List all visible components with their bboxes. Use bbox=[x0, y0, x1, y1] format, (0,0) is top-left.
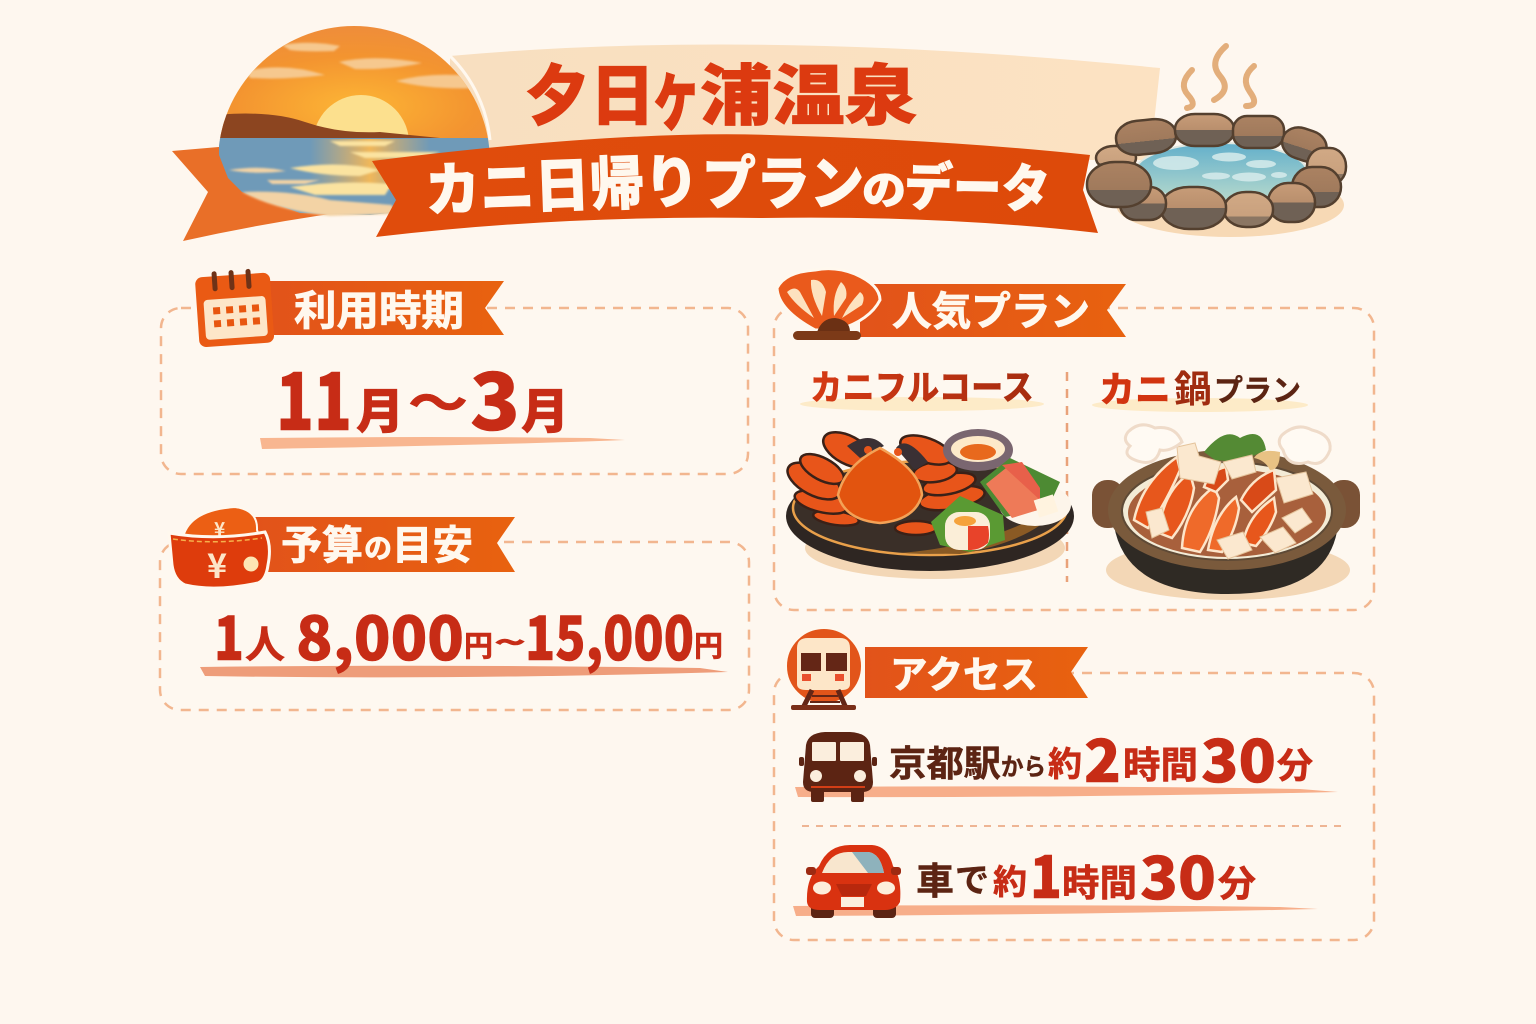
steam clouds bbox=[1125, 425, 1330, 464]
travel time text: 車 bbox=[916, 851, 954, 905]
subheading: カニ鍋プラン: プラン bbox=[1214, 366, 1301, 410]
section heading: 予算 bbox=[281, 513, 363, 571]
divider bbox=[1066, 372, 1068, 582]
icon: shell bbox=[777, 269, 880, 340]
shadow bbox=[1106, 540, 1350, 600]
illustration: crab platter bbox=[782, 425, 1074, 579]
budget value: 円 bbox=[694, 623, 723, 665]
tofu blocks bbox=[1146, 443, 1313, 559]
section heading: 目安 bbox=[392, 513, 473, 571]
illustration: crab hot pot bbox=[1092, 425, 1360, 600]
icon: wallet: ¥ bbox=[207, 539, 227, 588]
subheading: カニ鍋プラン: 鍋 bbox=[1174, 359, 1212, 413]
leafy greens bbox=[1204, 434, 1266, 462]
budget value: 15,000 bbox=[525, 591, 694, 678]
underline bbox=[793, 905, 1318, 916]
subtitle: データ bbox=[904, 145, 1051, 223]
panel outline bbox=[160, 542, 749, 710]
panel: 利用時期 bbox=[161, 267, 748, 474]
underline bbox=[795, 786, 1338, 797]
sun bbox=[316, 95, 408, 135]
icon: wallet bbox=[169, 507, 269, 588]
panel: アクセス bbox=[774, 628, 1374, 940]
travel time text: 約 bbox=[1048, 737, 1082, 786]
route row: by car bbox=[793, 831, 1318, 918]
section ribbon bbox=[255, 517, 515, 572]
crab legs bbox=[1134, 457, 1276, 552]
subtitle: プラン bbox=[702, 137, 864, 221]
travel time text: 2 bbox=[1084, 715, 1121, 799]
pool water bbox=[1135, 143, 1307, 201]
travel time text: 1 bbox=[1030, 831, 1062, 915]
subtitle bbox=[424, 134, 1051, 228]
budget value: 1 bbox=[214, 591, 244, 678]
section heading: 人気プラン bbox=[892, 279, 1090, 337]
icon: train bbox=[786, 628, 862, 710]
main title: ヶ bbox=[651, 33, 701, 145]
travel time text: 30 bbox=[1201, 715, 1276, 799]
route row: bus from Kyoto Station bbox=[795, 715, 1338, 802]
pot body bbox=[1114, 525, 1338, 594]
icon: calendar bbox=[194, 267, 274, 347]
travel time text: 分 bbox=[1277, 738, 1313, 789]
sand shadow bbox=[1116, 173, 1344, 237]
travel time text: で bbox=[955, 853, 989, 902]
left orange ribbon tail bbox=[172, 140, 420, 241]
travel time text: 30 bbox=[1140, 832, 1216, 916]
icon: bus bbox=[799, 732, 877, 802]
travel time text: 時間 bbox=[1062, 853, 1137, 907]
sunset illustration bbox=[210, 20, 500, 216]
travel time text: 京都駅 bbox=[889, 735, 1001, 787]
subheading: カニ鍋プラン bbox=[1092, 359, 1308, 413]
panel outline bbox=[774, 308, 1374, 610]
budget value: ~ bbox=[494, 618, 526, 664]
water highlights bbox=[1153, 152, 1287, 182]
mushroom bbox=[1254, 451, 1280, 470]
crab legs bbox=[782, 425, 986, 535]
icon: wallet: ¥ bbox=[214, 515, 225, 542]
main title: 夕日 bbox=[525, 43, 655, 139]
orange subtitle ribbon bbox=[372, 134, 1098, 237]
travel time text bbox=[889, 715, 1313, 799]
rocks bbox=[1087, 114, 1346, 229]
section heading: 利用時期 bbox=[294, 277, 464, 337]
budget value bbox=[214, 591, 723, 678]
period value: 3 bbox=[470, 341, 520, 453]
period value: ～ bbox=[408, 362, 468, 437]
platter bbox=[786, 461, 1074, 571]
panel: 予算の目安 bbox=[160, 507, 749, 710]
section heading bbox=[281, 513, 473, 571]
panel: 人気プラン bbox=[774, 269, 1374, 610]
subtitle: カニ日帰り bbox=[424, 134, 700, 228]
panel outline bbox=[161, 308, 748, 474]
section ribbon bbox=[865, 647, 1088, 698]
hot spring illustration bbox=[1087, 46, 1346, 237]
clouds bbox=[246, 43, 478, 88]
travel time text: 分 bbox=[1218, 855, 1256, 907]
hills bbox=[215, 114, 440, 138]
sauce dish bbox=[943, 429, 1013, 471]
row divider bbox=[802, 825, 1348, 827]
garnish roll bbox=[931, 496, 1005, 552]
sea glow bbox=[310, 139, 430, 189]
sea bbox=[219, 138, 495, 215]
travel time text: から bbox=[1001, 747, 1046, 782]
main title: 浦温泉 bbox=[700, 43, 917, 139]
section heading: の bbox=[364, 527, 392, 567]
period value bbox=[276, 341, 569, 453]
section ribbon bbox=[265, 281, 504, 335]
travel time text bbox=[916, 831, 1256, 916]
section heading: アクセス bbox=[890, 644, 1038, 699]
budget value: 8,000 bbox=[296, 591, 464, 678]
main title bbox=[525, 33, 917, 145]
sashimi plate bbox=[999, 484, 1071, 526]
subtitle: の bbox=[862, 158, 906, 216]
header banner bbox=[172, 20, 1160, 241]
section ribbon bbox=[860, 284, 1126, 337]
travel time text: 約 bbox=[993, 855, 1027, 904]
icon: car bbox=[806, 845, 901, 918]
travel time text: 時間 bbox=[1123, 735, 1198, 789]
budget value: 円 bbox=[464, 623, 493, 665]
infographic canvas bbox=[158, 26, 1376, 942]
underline bbox=[200, 666, 728, 677]
period value: 月 bbox=[521, 372, 569, 442]
steam bbox=[1184, 46, 1254, 108]
panel outline bbox=[774, 673, 1374, 940]
subheading: カニフルコース: カニフルコース bbox=[810, 360, 1034, 411]
cream title ribbon bbox=[450, 44, 1160, 160]
handles bbox=[1092, 480, 1124, 528]
period value: 11 bbox=[276, 341, 352, 453]
sea highlights bbox=[290, 141, 440, 195]
period value: 月 bbox=[356, 372, 404, 442]
subheading: カニ鍋プラン: カニ bbox=[1099, 361, 1171, 413]
underline bbox=[260, 437, 625, 449]
budget value: 人 bbox=[245, 614, 285, 669]
crab shell bbox=[838, 448, 922, 523]
shadow bbox=[805, 517, 1065, 579]
sunset white edge bbox=[450, 56, 490, 140]
